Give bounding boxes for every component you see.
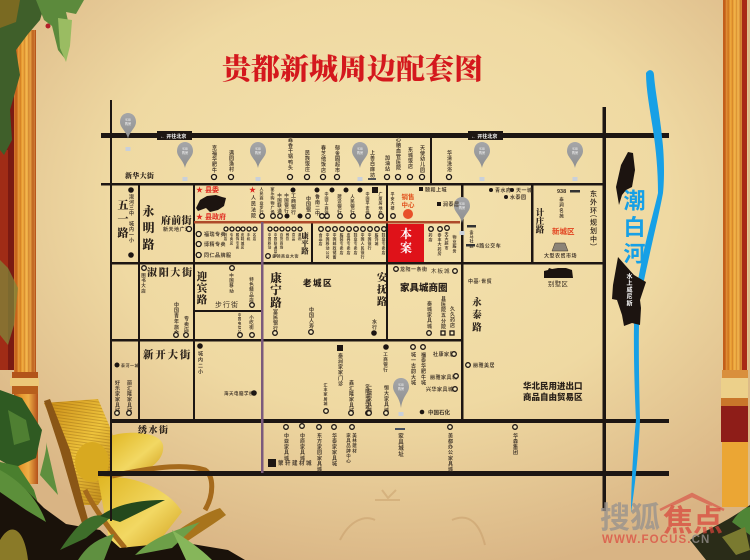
POI row north of Xinhua street: 春芝他饭店 [320,144,326,174]
map pins: 938 [357,147,363,151]
sales centre: 销售 [402,192,414,201]
map pins: 购房 [459,205,465,210]
direction sign: to Beijing west: ← 开往北京 [160,133,186,140]
icon: wholesale market [552,243,568,251]
POI row north of Xinhua street: 东城饭店 [407,146,413,170]
POI row north of red road: 人民银行 [350,194,356,215]
Xinkai street block [143,343,257,397]
chair flower cushion [75,442,109,482]
POI beside sales centre: 润泰居 [443,201,460,208]
POI block Kangping road: 餐饮 [285,232,290,241]
Yongtai road block: 别墅区 [548,279,568,288]
POI block east of Kangping road: 中国银行 [367,232,372,251]
river name: 潮白河 [620,189,646,268]
POI block east of Kangping road: 皮具专卖店 [346,232,351,255]
old town block: 老城区 [303,278,333,288]
furniture city business circle: 久久药店 [449,305,455,329]
POI row south of Xiushui street: 蒙轩建材城 [278,459,313,467]
POI block Kangping road: 康平路 [300,231,310,256]
POI row south of Xiushui street [268,424,518,473]
armchair [44,399,226,553]
POI row north of Xinhua street: 上善白麻坊 [369,149,375,179]
POI row south of Xiushui street: 华森集团 [512,432,518,456]
icon: building materials city [268,459,276,467]
POI block west of red road south side: 手机 [246,232,251,241]
POI block north east: 天一城 [516,187,533,194]
street: Wuyi road block: 城内一小 [128,220,134,244]
map pins: 938 [125,118,131,122]
Anfu road: 水行 [371,318,377,331]
new city district: 东外环(规划中) [590,189,597,247]
street: Yongming road and Fuqian street [141,204,192,254]
title: 贵都新城周边配套图 [222,53,483,86]
sales centre [402,192,415,219]
direction sign: to Beijing east [468,131,503,140]
map [98,70,669,521]
furniture block east: 丽雅美居 [473,362,495,369]
Anfu road: 安抚路 [374,271,386,308]
new city district: 大型农贸市场 [544,252,577,260]
POI block east of Kangping road: 中国邮政储蓄 [332,232,337,259]
POI block east of project: 药店 [428,232,434,242]
POI row south of Xiushui street: 美都办公家具城 [447,432,453,473]
new city district: 938 [557,189,566,195]
Xiuhe block: 泰河一城 [121,362,139,368]
Xinkai street block: 城内二小 [197,350,203,375]
POI block east of project: 泰丰大药房 [438,232,442,256]
POI block Kangping road: 中国联通营业 [273,232,278,258]
street: Yongming road and Fuqian street: 新天地广场 [163,226,191,233]
project block [388,224,424,262]
chair back [44,399,118,505]
road network [98,100,669,521]
new city district: 新城区 [552,226,575,236]
map pins: 购房 [125,121,131,126]
Xiushui street: 绣水街 [138,424,170,435]
furniture city business circle: 泰城家具城 [426,300,432,330]
POI block west of red road south side [196,227,257,259]
Shuyang street block [141,266,194,337]
POI block east of Kangping road: 鞋业专卖店 [353,232,358,255]
map pins: 938 [479,147,485,151]
plant bottom right [690,505,750,560]
POI row north of Xinhua street [211,136,452,180]
Anfu road [371,271,386,336]
government block: 人民法院 [250,195,256,219]
government block: ★ [249,186,256,194]
POI block west of red road south side: 皮鞋城店 [240,232,245,249]
POI block east of project: 天天超市 [444,232,450,250]
POI block west of red road south side: 名店 [252,232,257,241]
map pins: 购房 [398,386,404,391]
Yingbin road block: 小吃街 [249,314,254,331]
silhouette: water venice [612,257,646,326]
POI block west of red road south side: 专卖店 [229,232,234,245]
POI block east of Kangping road: 服装专卖店 [339,232,344,255]
POI row north of red road: 中国联通 [277,192,282,214]
POI row north of Xinhua street: 加油站 [384,154,390,173]
direction sign: to Beijing east: ← 开往北京 [471,133,497,140]
POI row south of Xiushui street: 华泰家家具城 [331,432,337,467]
POI row north of red road: 中国银 [305,195,311,214]
old town block: 中国人寿 [308,306,314,329]
Shuyang street block: 中国青年旅舍 [173,301,179,336]
government block [196,185,256,221]
furniture city business circle [394,266,457,335]
Xiuhe block [114,362,139,415]
watermark: Sohu Focus: WWW.FOCUS.CN [602,534,710,546]
icon: villa silhouette [544,268,573,278]
furniture city business circle: 家具城商圈 [400,282,448,294]
street: Wuyi road block: 淑河三中 [128,193,134,217]
POI block east of project: 4路公交车 [476,242,501,250]
POI block west of red road south side: 博精专卖 [204,241,226,248]
POI row north of Xinhua street: 京福华肥牛 [211,144,217,174]
street: Yongming road and Fuqian street: 府前街 [161,214,192,227]
plants bottom left [0,442,245,560]
Xinkai street block: 海天电脑学校 [224,390,254,397]
furniture block east: 工商银行 [383,352,388,373]
street: Yongming road and Fuqian street: 永明路 [141,204,155,254]
POI row north of Xinhua street: 民族饭庄 [304,150,310,173]
POI block east of Kangping road [318,227,386,259]
POI block east of Kangping road: 中国人民银行 [360,232,365,259]
POI row north of Xinhua street: 鑫香干锅鸭头 [287,136,293,171]
Shuyang street block: 图书大店 [141,273,146,294]
Yongtai road block [468,268,583,402]
street name: Xinhua: 新华大街 [125,171,154,180]
Yongtai road block: 永泰路 [470,296,482,334]
sales centre: 中心 [402,200,415,209]
POI row north of Xinhua street: 天使幼儿园 [419,145,425,174]
map pins: 购房 [255,150,261,155]
old town block [269,271,333,335]
POI block west of red road south side: 同仁品牌服 [204,252,232,259]
POI block Kangping road: 食品 [291,232,296,241]
furniture city business circle: 木板城 [431,267,451,275]
furniture block west [324,345,370,415]
icon: sales centre emblem [403,209,413,219]
POI block Kangping road: 金领商业大街 [272,252,299,258]
map pins: 938 [572,147,578,151]
POI row north of red road: 中国银行 [284,192,290,214]
POI block Kangping road: 通讯 [297,232,302,241]
Xiuhe block: 好乐家家具城 [114,379,120,414]
old town block: 康宁路 [269,271,282,308]
Yingbin road block: 中国电信公司 [237,312,242,338]
watermark: Sohu Focus: 搜狐 [600,502,660,535]
Yongtai road block: 商品自由贸易区 [523,392,583,402]
furniture city business circle: 县医院五分院 [440,296,446,330]
map pins: 购房 [182,150,188,155]
direction sign: to Beijing west [157,131,192,140]
project block: 案 [400,240,412,255]
POI row north of red road: 鲁南二中 [314,193,320,217]
government block: ★ 县委 [196,185,219,194]
furniture block east [366,344,495,416]
map pins: 购房 [572,150,578,155]
POI block east of Kangping road: 鞋业专卖店 [381,232,386,255]
POI row north of red road: 平安大楼 [390,192,396,210]
furniture block east: 恒大家具城 [383,384,389,414]
POI row south of Xiushui street: 家具品牌中心 [346,432,352,464]
furniture block west: 汇丰家居城 [324,382,328,406]
map pins: 938 [398,383,404,387]
furniture block west: 泰润家家门诊 [337,352,343,387]
POI row north of red road [260,186,396,220]
POI row north of Xinhua street: 华清洗浴 [446,149,452,173]
new city district: 泰润名苑 [559,196,564,219]
POI row north of Xinhua street: 郁金园超市 [334,144,340,174]
river: Chaobai [631,70,664,513]
furniture block west: 汇隆家居城 [365,383,370,410]
furniture block east: 城一古韵大城 [410,351,416,386]
POI block Kangping road: 中国移动 [267,232,272,249]
map pins: 938 [255,147,261,151]
Yingbin road block: 步行街 [215,300,239,309]
new city district: 计庄路 [535,207,545,234]
Yingbin road block: 迎宾路 [196,270,207,305]
silhouette: upper trees [616,152,635,205]
POI row south of Xiushui street: 美林建材 [352,432,358,454]
faint ornament at the bottom centre [340,490,485,545]
Shuyang street block: 专卖店 [183,315,189,334]
project block: 本 [400,226,412,241]
map pins: 938 [459,202,465,206]
POI row north of Xinhua street: 满园渔村 [228,149,234,172]
Yingbin road block [196,266,254,338]
POI row north of red road: 中国工商银行 [324,191,330,220]
POI row north of red road: 建设银行 [337,193,342,215]
map pins: 938 [182,147,188,151]
furniture city business circle: 龙阳一条街 [400,266,428,273]
furniture block east: 兴华家具城 [426,386,454,393]
furniture block east: 社康家居 [433,351,455,358]
POI block east of Kangping road: 服饰城 [374,232,379,246]
street: Wuyi road block [116,187,134,258]
POI block west of red road south side: 服饰专卖 [235,232,240,249]
map pins: 购房 [479,150,485,155]
POI block east of Kangping road: 食品店 [318,232,323,246]
street: Wuyi road block: 五一路 [116,199,128,241]
Yingbin road block: 特色精品店 [249,276,254,303]
new city district [535,189,597,260]
furniture block east: 福泰华肥牛城 [420,351,426,386]
POI row north of red road: 中国平安保险 [366,191,370,220]
Xiuhe block: 丽汇隆家具城 [126,380,132,414]
Yongtai road block: 华北民用进出口 [523,381,583,391]
POI beside sales centre [419,186,460,208]
POI row south of Xiushui street: 东方家园家具城 [316,432,322,473]
POI block north east: 青水府 [495,187,512,194]
chair arms [112,467,212,510]
POI block west of red road south side: 药店 [223,232,228,241]
POI row north of red road: 家乐购物广场街 [270,186,276,219]
POI block east of project: 物业服务 [452,234,458,253]
POI block west of red road south side: 福瑞专卖 [204,231,226,238]
POI row north of Xinhua street: 心脑血管医院 [395,136,401,171]
Xinkai street block: 新开大街 [143,348,192,361]
map pins: 购房 [357,150,363,155]
Yingbin road block: 中国移动 [229,272,234,294]
left column with foliage [0,0,84,510]
POI row south of Xiushui street: 中亚家具城 [283,432,289,462]
furniture block west: 鑫汇隆家具城 [348,379,354,414]
POI beside sales centre: 颐和上城 [425,186,447,194]
Shuyang street block: 淑阳大街 [147,266,194,279]
chair cushion [110,433,163,477]
POI row south of Xiushui street: 家具城址 [397,432,404,457]
POI block north east: 水泰园 [510,194,527,201]
right column [721,0,750,560]
watermark: Sohu Focus [600,494,724,546]
silhouette: water venice: 水上威尼斯 [625,272,632,307]
icon: government building silhouette [196,195,226,212]
POI block Kangping road: 百货商场 [279,232,284,249]
POI block east of project [428,225,501,256]
POI block north east [489,187,533,201]
POI block east of Kangping road: 中国移动公司 [325,232,330,259]
government block: ★ 县政府 [196,212,226,221]
old town block: 富民银行 [272,308,278,332]
POI block east of project: 金马社区 [470,229,474,248]
Yongtai road block: 中基·世贸 [468,278,492,285]
furniture block east: 中国石化 [428,408,451,416]
POI block Kangping road [266,227,310,258]
POI row north of red road: 广厦房地产 [378,191,384,215]
POI row north of red road: 人民商业步行街 [260,187,264,219]
furniture block east: 丽雅家具城 [430,374,458,381]
POI row north of red road: 工商银行 [290,193,296,216]
map pins [120,113,583,416]
POI row south of Xiushui street: 中原家具城 [299,432,305,462]
watermark: Sohu Focus: 焦点 [663,505,723,538]
furniture block east: 仁瑞家具城 [366,384,372,414]
